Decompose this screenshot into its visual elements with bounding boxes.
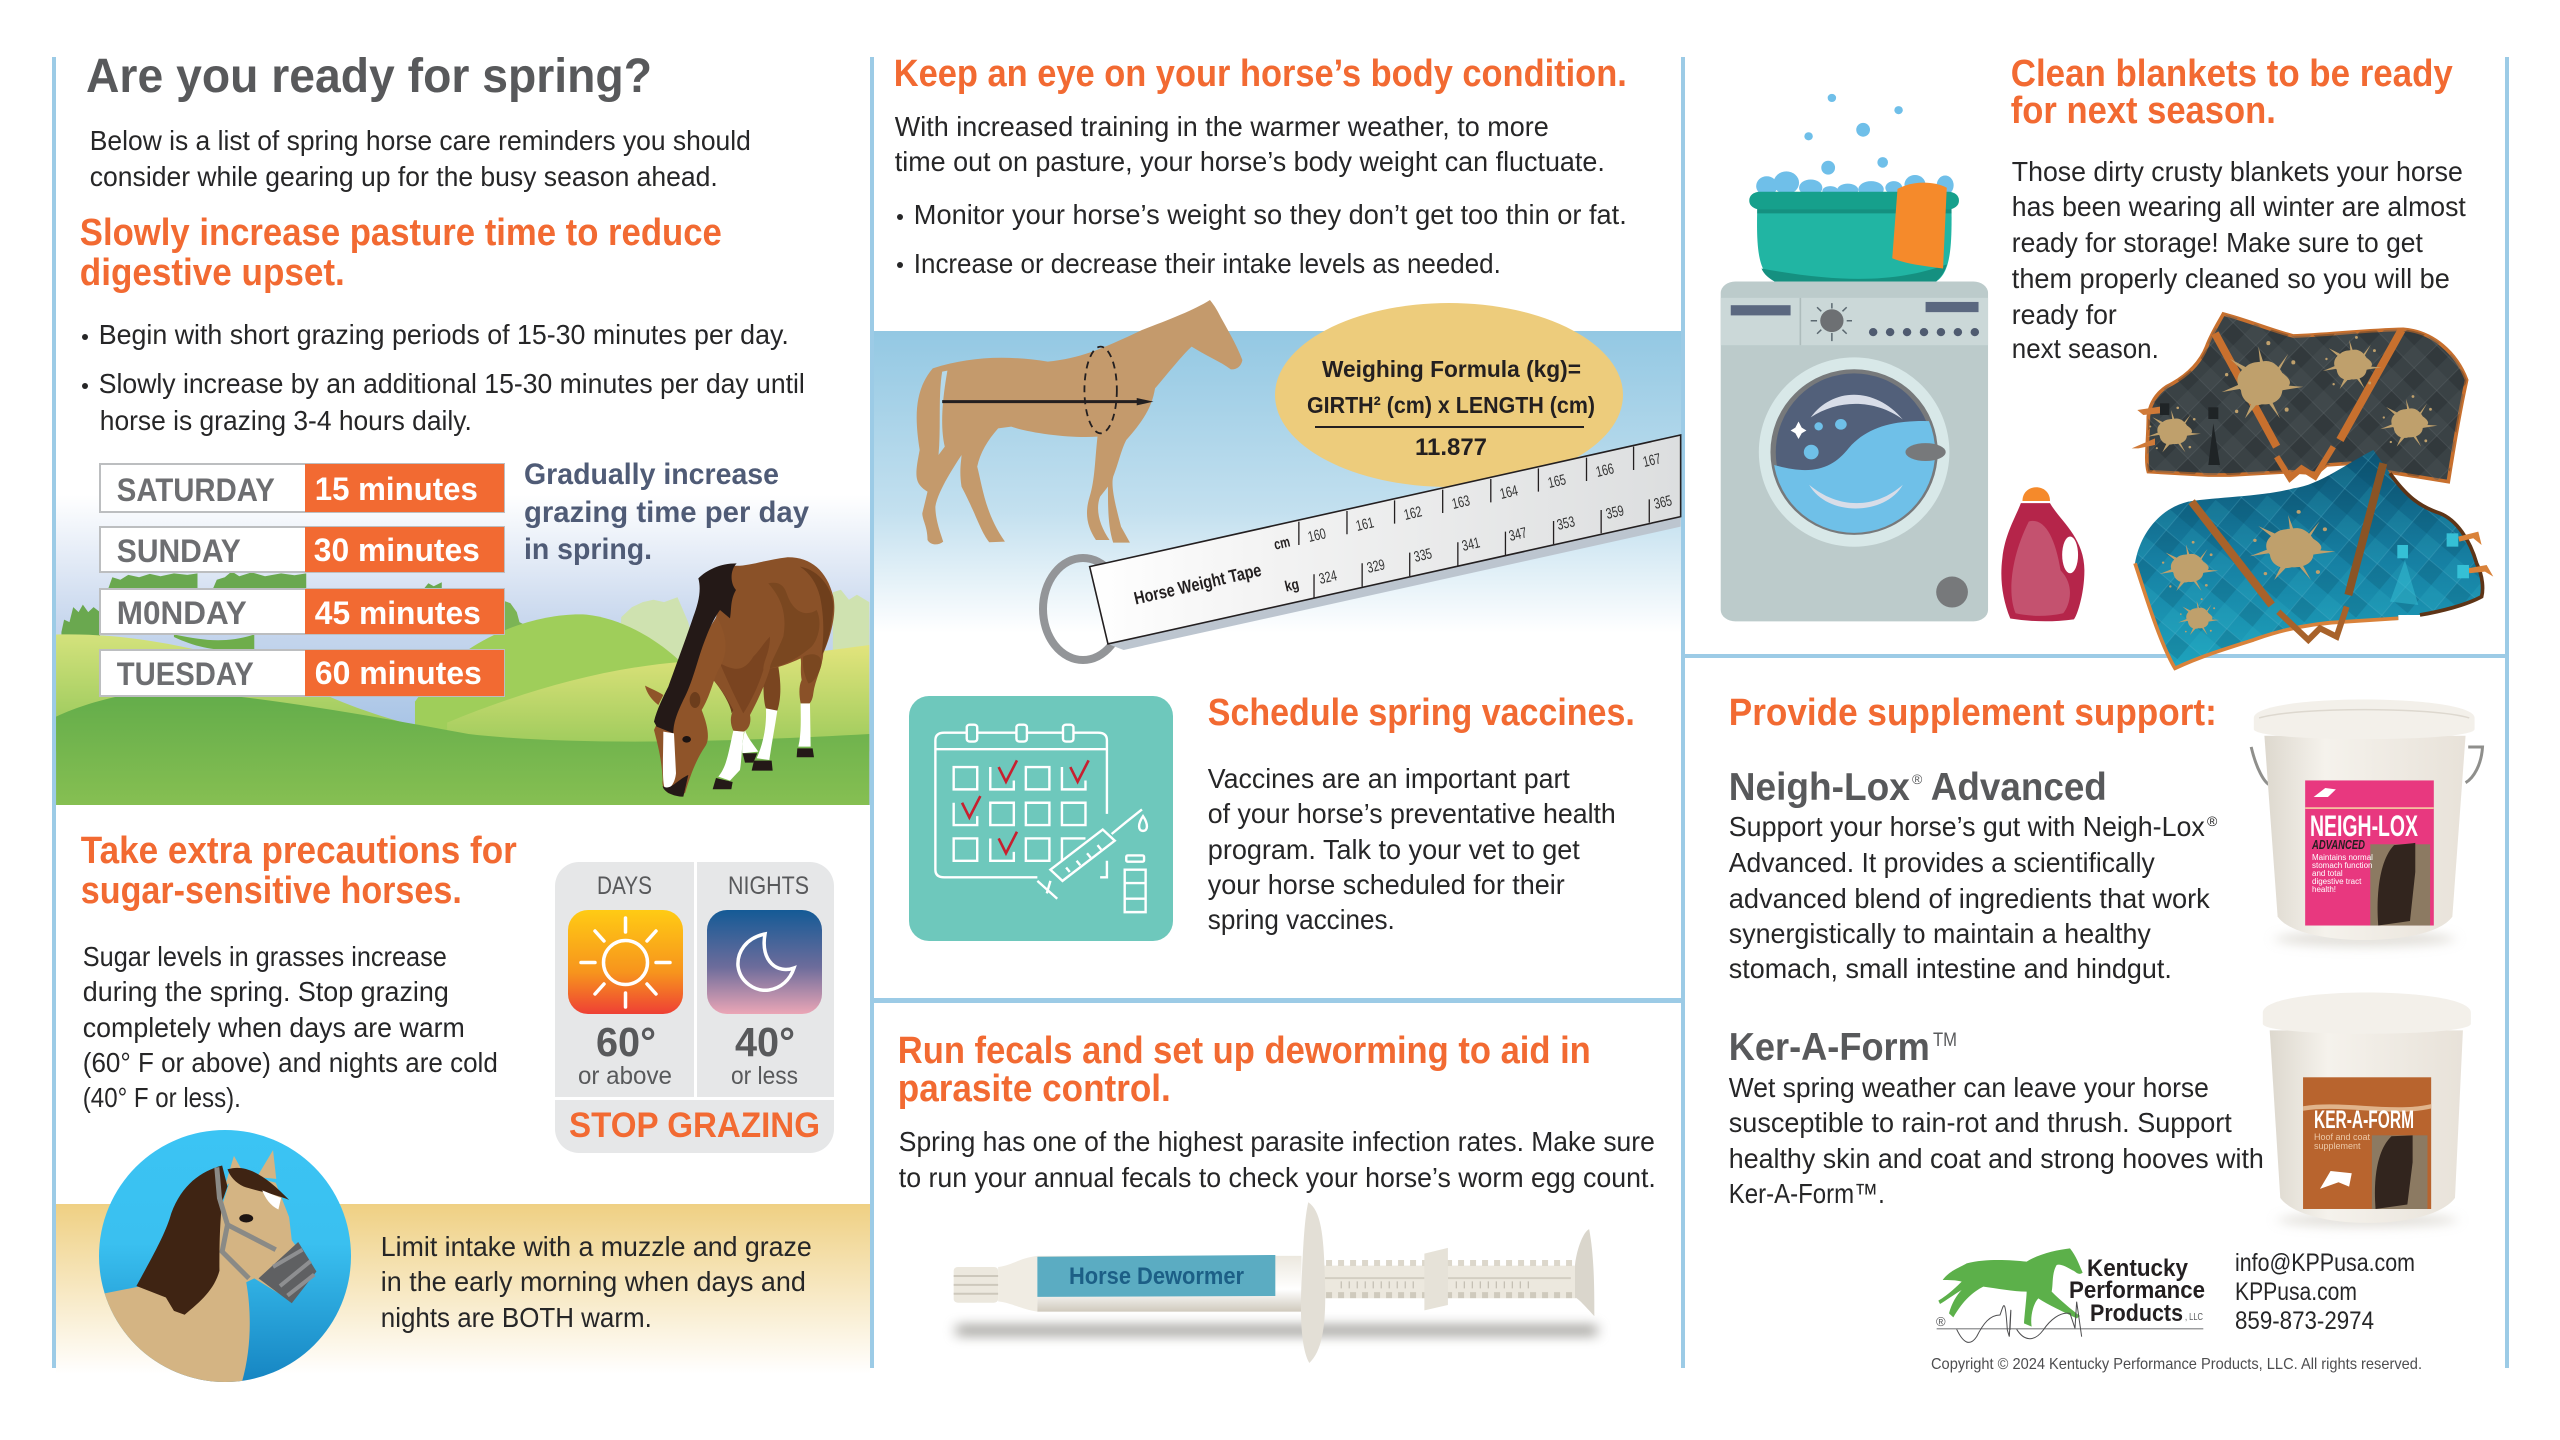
icon: horse weight tape: 165 (1546, 471, 1568, 492)
text: blankets (2012, 156, 2466, 364)
logo: Kentucky Performance Products: ® (1936, 1314, 1946, 1329)
grazing schedule table: TUESDAY (117, 656, 254, 692)
contact details: KPPusa.com (2235, 1278, 2357, 1306)
text: sugar levels (83, 941, 498, 1113)
text: blankets: ready for (2012, 299, 2117, 330)
panel: stop grazing temperatures: NIGHTS (728, 872, 809, 900)
callout: gradually increase: in spring. (524, 533, 652, 566)
panel: stop grazing temperatures: or above (578, 1062, 672, 1090)
grazing schedule table (100, 464, 504, 696)
heading: blankets (2011, 53, 2453, 132)
heading: vaccines: Schedule spring vaccines. (1208, 692, 1635, 734)
heading: pasture time: digestive upset. (80, 252, 345, 294)
text: sugar levels: during the spring. Stop grazing (83, 976, 449, 1007)
text: Neigh-Lox: ® (2207, 813, 2218, 829)
icon: Neigh-Lox pail: and total (2312, 869, 2343, 878)
icon: dirty blankets (2132, 314, 2493, 668)
icon: wash tub (1749, 171, 1959, 282)
text: Neigh-Lox: Support your horse’s gut with Neigh-Lox (1729, 811, 2205, 842)
icon: horse weight tape: 329 (1365, 556, 1387, 577)
product heading: Neigh-Lox (1729, 766, 2107, 809)
panel: stop grazing temperatures: or less (731, 1062, 798, 1090)
icon: Ker-A-Form pail: Hoof and coat (2314, 1132, 2371, 1142)
text: sugar levels: completely when days are warm (83, 1012, 465, 1043)
product heading: Neigh-Lox: Neigh-Lox (1729, 766, 1910, 809)
icon: horse weight tape: 347 (1507, 524, 1529, 545)
callout: weighing formula (1275, 303, 1623, 487)
icon: horse silhouette with measurements (916, 300, 1242, 544)
icon: horse weight tape: 324 (1317, 567, 1339, 588)
text: Ker-A-Form: susceptible to rain-rot and thrush. Support (1729, 1107, 2232, 1138)
text: limit intake: Limit intake with a muzzle and graze (381, 1231, 812, 1262)
logo: Kentucky Performance Products: Performance (2069, 1277, 2205, 1304)
panel: stop grazing temperatures: DAYS (597, 872, 652, 900)
grazing schedule table: M0NDAY (117, 595, 247, 631)
icon: Ker-A-Form pail: supplement (2314, 1141, 2361, 1151)
icon: Neigh-Lox pail: Maintains normal (2312, 853, 2373, 862)
text: limit intake: in the early morning when days and (381, 1266, 806, 1297)
heading: fecals: Run fecals and set up deworming to aid in (898, 1030, 1591, 1072)
text: sugar levels: Sugar levels in grasses increase (83, 941, 447, 972)
icon: Neigh-Lox pail: stomach function (2312, 861, 2372, 870)
text: Ker-A-Form: Wet spring weather can leave your horse (1729, 1072, 2209, 1103)
icon: horse weight tape: 164 (1498, 482, 1520, 503)
icon: Ker-A-Form pail: KER-A-FORM (2314, 1106, 2414, 1134)
text: blankets: them properly cleaned so you will be (2012, 263, 2450, 294)
heading: fecals (898, 1030, 1591, 1110)
text: Neigh-Lox: advanced blend of ingredients that work (1729, 883, 2211, 914)
icon: Neigh-Lox pail (2251, 700, 2483, 947)
icon: sun (568, 910, 683, 1014)
icon: horse weight tape (1043, 435, 1681, 660)
intro text: consider while gearing up for the busy season ahead. (90, 161, 718, 192)
product heading: Neigh-Lox: Advanced (1931, 766, 2107, 809)
icon: horse weight tape: 167 (1641, 450, 1663, 471)
icon: Neigh-Lox pail: health! (2312, 885, 2336, 894)
grazing schedule table: SATURDAY (117, 472, 275, 508)
heading: supplement support: Provide supplement support: (1729, 692, 2217, 734)
icon: horse weight tape: 166 (1594, 460, 1616, 481)
icon: washer (1721, 282, 1988, 621)
logo: Kentucky Performance Products (1936, 1248, 2205, 1342)
text: sugar levels: (60° F or above) and nights are cold (83, 1047, 498, 1078)
icon: Neigh-Lox pail: NEIGH-LOX (2310, 810, 2418, 843)
contact details (2235, 1249, 2415, 1335)
text: blankets: ready for storage! Make sure to get (2012, 227, 2423, 258)
icon: horse weight tape: 160 (1306, 525, 1328, 546)
icon: horse weight tape: kg (1283, 576, 1301, 595)
heading: blankets: Clean blankets to be ready (2011, 53, 2453, 95)
title: Are you ready for spring? (86, 50, 652, 103)
intro text (90, 125, 751, 192)
callout: gradually increase: Gradually increase (524, 458, 779, 491)
text: body condition (895, 111, 1627, 279)
icon: detergent bottle (2001, 487, 2084, 621)
text: Ker-A-Form: Ker-A-Form™. (1729, 1178, 1885, 1209)
copyright: Copyright © 2024 Kentucky Performance Products, LLC. All rights reserved. (1931, 1356, 2422, 1373)
contact details: 859-873-2974 (2235, 1307, 2374, 1335)
icon: Neigh-Lox pail: ADVANCED (2311, 837, 2365, 852)
grazing schedule table: 30 minutes (314, 532, 480, 568)
heading: pasture time (80, 212, 722, 294)
icon: horse weight tape: 365 (1652, 492, 1674, 513)
heading: sugar-sensitive: sugar-sensitive horses. (81, 870, 462, 912)
product heading: Ker-A-Form: TM (1933, 1030, 1957, 1051)
panel: sky band body condition (874, 331, 1681, 633)
grazing schedule table: 60 minutes (315, 655, 482, 691)
product heading: Neigh-Lox: ® (1912, 771, 1923, 787)
heading: sugar-sensitive (81, 830, 517, 912)
icon: horse weight tape: cm (1272, 534, 1292, 554)
text: Neigh-Lox: synergistically to maintain a healthy (1729, 918, 2151, 949)
icon: horse weight tape: 163 (1450, 492, 1472, 513)
grazing schedule table: 45 minutes (315, 595, 481, 631)
text: Ker-A-Form: healthy skin and coat and strong hooves with (1729, 1143, 2264, 1174)
heading: blankets: for next season. (2011, 90, 2276, 132)
heading: body condition: Keep an eye on your horse’s body condition. (894, 53, 1627, 95)
contact details: info@KPPusa.com (2235, 1249, 2415, 1277)
text: blankets: has been wearing all winter are almost (2012, 191, 2466, 222)
text: body condition: Increase or decrease their intake levels as needed. (914, 248, 1501, 279)
icon: dewormer syringe (954, 1202, 1597, 1363)
text: Ker-A-Form (1729, 1072, 2264, 1209)
intro text: Below is a list of spring horse care reminders you should (90, 125, 751, 156)
logo: Kentucky Performance Products: Products (2090, 1300, 2183, 1327)
callout: gradually increase (524, 458, 809, 566)
bullets: grazing: horse is grazing 3-4 hours daily. (100, 405, 472, 436)
icon: horse weight tape: 341 (1460, 534, 1482, 555)
text: Neigh-Lox: stomach, small intestine and hindgut. (1729, 953, 2172, 984)
icon: dark blanket (2132, 314, 2467, 482)
icon: vaccine calendar (909, 696, 1173, 941)
bullets: grazing: Slowly increase by an additional 15-30 minutes per day until (99, 368, 805, 399)
text: vaccines: spring vaccines. (1208, 904, 1395, 935)
icon: Neigh-Lox pail: digestive tract (2312, 877, 2362, 886)
text: body condition: With increased training in the warmer weather, to more (895, 111, 1549, 142)
text: limit intake (381, 1231, 812, 1333)
text: body condition: Monitor your horse’s weight so they don’t get too thin or fat. (914, 199, 1627, 230)
panel: pasture meadow background (56, 495, 870, 805)
icon: horse with grazing muzzle (94, 1130, 351, 1386)
icon: blue blanket (2135, 450, 2493, 668)
text: body condition: time out on pasture, your horse’s body weight can fluctuate. (895, 146, 1605, 177)
heading: fecals: parasite control. (898, 1068, 1171, 1110)
logo: Kentucky Performance Products: , LLC (2185, 1312, 2203, 1323)
text: Neigh-Lox: Advanced. It provides a scientifically (1729, 847, 2155, 878)
icon: horse weight tape: 335 (1412, 545, 1434, 566)
panel: stop grazing temperatures: STOP GRAZING (569, 1106, 820, 1145)
icon: Ker-A-Form pail (2263, 992, 2471, 1227)
text: blankets: next season. (2012, 333, 2159, 364)
bullets: grazing (82, 319, 805, 436)
text: limit intake: nights are BOTH warm. (381, 1302, 652, 1333)
icon: horse weight tape: 161 (1354, 514, 1376, 535)
heading: pasture time: Slowly increase pasture time to reduce (80, 212, 722, 254)
icon: horse weight tape: 353 (1555, 513, 1577, 534)
grazing schedule table: 15 minutes (315, 471, 478, 507)
text: vaccines: program. Talk to your vet to get (1208, 834, 1580, 865)
product heading: Ker-A-Form: Ker-A-Form (1729, 1026, 1930, 1069)
icon: washing machine, tub and detergent (1721, 94, 2084, 621)
text: vaccines (1208, 763, 1616, 935)
text: fecals: to run your annual fecals to check your horse’s worm egg count. (899, 1162, 1656, 1193)
grazing schedule table: SUNDAY (117, 533, 241, 569)
text: blankets: Those dirty crusty blankets your horse (2012, 156, 2463, 187)
callout: weighing formula: Weighing Formula (kg)= (1322, 356, 1581, 382)
panel: stop grazing temperatures: 40° (735, 1019, 795, 1065)
logo: Kentucky Performance Products: Kentucky (2087, 1255, 2189, 1282)
heading: sugar-sensitive: Take extra precautions for (81, 830, 517, 872)
callout: gradually increase: grazing time per day (524, 496, 809, 529)
panel: stop grazing temperatures (555, 862, 834, 1153)
text: fecals: Spring has one of the highest parasite infection rates. Make sure (899, 1126, 1655, 1157)
panel: stop grazing temperatures: 60° (596, 1019, 656, 1065)
callout: weighing formula: 11.877 (1415, 434, 1487, 461)
text: sugar levels: (40° F or less). (83, 1082, 241, 1113)
icon: horse weight tape: Horse Weight Tape (1132, 560, 1263, 609)
panel: tan band (56, 1204, 870, 1374)
callout: weighing formula: GIRTH² (cm) x LENGTH (cm) (1307, 392, 1595, 418)
icon: dewormer syringe: Horse Dewormer (1069, 1263, 1244, 1290)
text: vaccines: your horse scheduled for their (1208, 869, 1565, 900)
text: fecals (899, 1126, 1656, 1193)
icon: soap bubbles (1804, 94, 1903, 175)
icon: horse weight tape: 162 (1402, 503, 1424, 524)
icon: moon (707, 910, 822, 1014)
text: vaccines: of your horse’s preventative health (1208, 798, 1616, 829)
text: Neigh-Lox (1729, 811, 2218, 984)
text: vaccines: Vaccines are an important part (1208, 763, 1570, 794)
icon: grazing horse (645, 557, 834, 797)
icon: horse weight tape: 359 (1604, 502, 1626, 523)
bullets: grazing: Begin with short grazing periods of 15-30 minutes per day. (99, 319, 789, 350)
